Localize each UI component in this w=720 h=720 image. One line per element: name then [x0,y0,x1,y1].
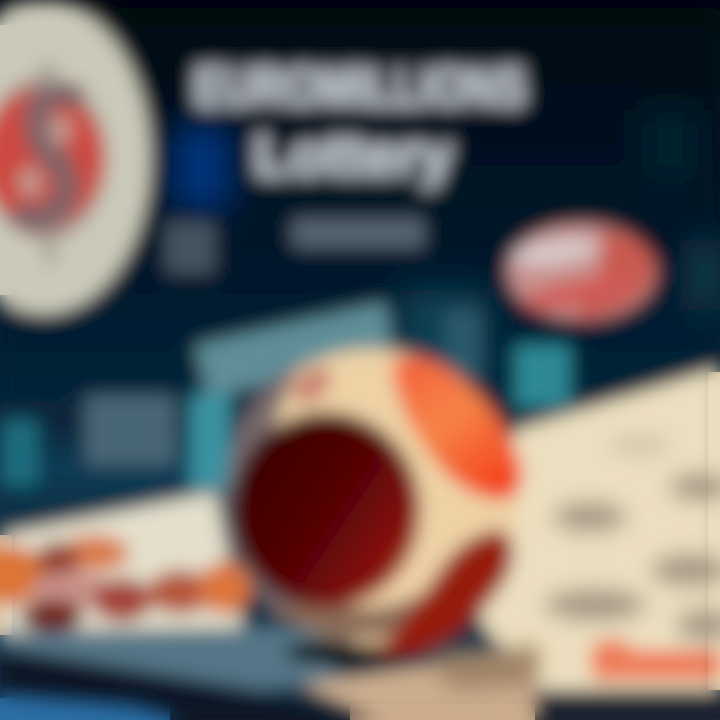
title [194,55,526,189]
lottery ticket right [480,368,720,700]
subtitle block [292,218,424,248]
ball top right red patch [392,357,522,500]
ball top left pink patch [286,360,338,410]
emblem dollar sign [14,94,82,218]
emblem: circular seal with dollar sign [0,2,150,314]
ball large red patch [232,412,420,608]
lottery ball [226,349,522,656]
left faint text block [165,222,215,274]
table surface foreground [0,627,720,720]
red and white pill badge [508,224,656,320]
red and orange numbers [0,535,251,632]
ball shaded edge [226,362,360,645]
ball lower right red patch [374,530,513,656]
teal middle panel [195,302,392,398]
orange printed text on ticket [590,639,720,680]
title: EUROMILLIONS [194,55,526,118]
ball shadow [284,639,416,665]
teal shapes on right [445,310,570,407]
lottery ticket left [0,492,251,640]
title: Lottery [254,122,453,189]
lower left text blocks [0,395,230,490]
background glow [0,110,720,490]
ticket number smudges [545,436,720,641]
